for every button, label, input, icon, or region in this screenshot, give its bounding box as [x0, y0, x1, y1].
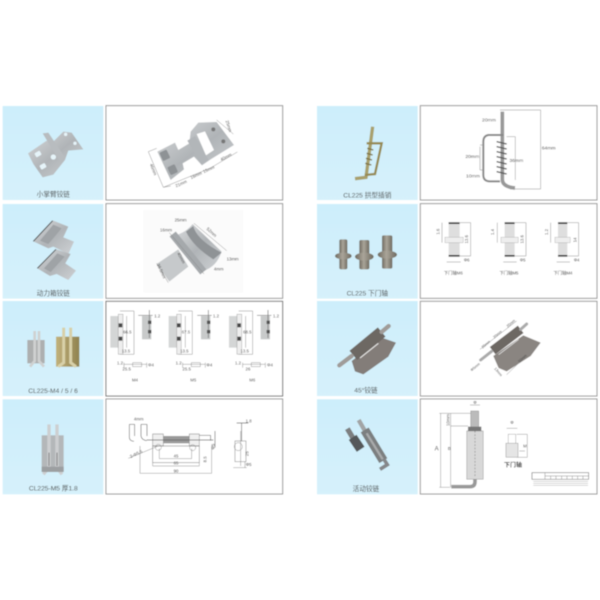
diagram: door shaft M6 M5 M4: 下门轴M4 [553, 269, 573, 276]
diagram: door shaft M6 M5 M4: 1.6 [435, 228, 440, 235]
diagram: M5 hinge side and top view: 90 [174, 469, 179, 474]
caption: CL225 拱型插销 [343, 190, 392, 199]
diagram: M5 hinge side and top view: 2-Φ5.5 [129, 449, 144, 459]
diagram: 45 degree hinge dimensions: 20mm [481, 340, 491, 349]
diagram: 45 degree hinge dimensions: Φ5mm [470, 362, 481, 372]
diagram: door shaft M6 M5 M4 [435, 222, 580, 276]
diagram: door shaft M6 M5 M4: Φ6 [464, 257, 470, 262]
diagram: door shaft M6 M5 M4: 13.6 [464, 235, 469, 244]
hinge catalogue sheet [3, 106, 597, 494]
diagram: power box hinge dimensions: 40mm [176, 251, 187, 265]
frame: technical drawing [106, 399, 283, 494]
frame: technical drawing [420, 204, 597, 298]
icon: 45 degree hinge [339, 326, 396, 374]
icon: small hinge photo [28, 132, 83, 177]
caption: 动力箱铰链 [37, 288, 70, 297]
diagram: M5 hinge side and top view: 25 [244, 451, 249, 456]
diagram: movable hinge drawing with table: Φ [473, 400, 477, 405]
diagram: latch dimensions: 20mm [482, 118, 496, 124]
diagram: power box hinge dimensions: 13mm [227, 257, 239, 262]
diagram: 45 degree hinge dimensions: 20mm [492, 330, 503, 339]
diagram: power box hinge dimensions: 4mm [214, 267, 224, 272]
diagram: M4 M5 M6 drawings: 68.5 [243, 329, 252, 334]
diagram: power box hinge dimensions: 36.5mm [156, 263, 167, 280]
frame: technical drawing [106, 301, 283, 396]
caption: 45°铰链 [354, 386, 378, 395]
diagram: M4 M5 M6 drawings: 1.2 [154, 314, 161, 319]
diagram: M5 hinge side and top view: 1.8 [246, 418, 252, 423]
caption: 小掌臂铰链 [37, 190, 70, 199]
diagram: M4 M5 M6 drawings: 1.2 [213, 314, 220, 319]
caption: CL225 下门轴 [347, 288, 388, 297]
frame: technical photo [420, 106, 597, 200]
diagram: M4 M5 M6 drawings: 67.5 [182, 329, 191, 334]
diagram: movable hinge drawing with table: A [435, 446, 439, 452]
diagram: M4 M5 M6 drawings: 13.5 [180, 349, 189, 354]
diagram: door shaft M6 M5 M4: Φ5 [520, 257, 526, 262]
icon: grey hinge [42, 424, 64, 474]
panel: row 2 left, power box hinge [3, 204, 283, 299]
frame: technical drawing [420, 399, 597, 494]
diagram: M4 M5 M6 drawings: 1.2 [176, 361, 182, 366]
diagram: movable hinge drawing with table [435, 400, 589, 487]
diagram: M5 hinge side and top view: 45 [174, 453, 179, 458]
diagram: M5 hinge side and top view: 65 [174, 461, 179, 466]
diagram: hinge dimensions: 46mm [149, 163, 158, 176]
diagram: movable hinge drawing with table: B [448, 446, 451, 451]
icon: two power box hinges [33, 221, 76, 280]
diagram: M4 M5 M6 drawings: Φ4 [206, 362, 213, 367]
diagram: power box hinge dimensions: 25mm [175, 218, 187, 223]
diagram: latch dimensions: 20mm [465, 154, 479, 160]
diagram: power box hinge dimensions [143, 210, 243, 293]
diagram: movable hinge drawing with table: M [523, 444, 527, 449]
panel: row 3 left, CL225-M4/5/6 [3, 301, 283, 396]
caption: 活动铰链 [353, 484, 380, 493]
diagram: movable hinge drawing with table: 下门轴 [504, 461, 522, 469]
diagram: hinge dimensions: 40mm [219, 152, 233, 162]
caption: CL225-M4 / 5 / 6 [28, 388, 78, 395]
diagram: M4 M5 M6 drawings: 25.5 [122, 367, 131, 372]
diagram: M5 hinge side and top view: 4mm [134, 416, 144, 421]
diagram: hinge dimensions: 25mm [225, 120, 233, 133]
icon: movable hinge parts [347, 420, 387, 469]
diagram: power box hinge dimensions: 52mm [206, 226, 218, 238]
diagram: latch dimensions: 10mm [466, 173, 480, 179]
diagram: hinge dimensions: 21mm [175, 179, 188, 188]
diagram: movable hinge drawing with table: 10mm [445, 414, 450, 426]
diagram: M4 M5 M6 drawings: M4 [132, 377, 139, 382]
diagram: hinge dimensions: 16mm [190, 170, 203, 180]
diagram: latch dimensions: 36mm [509, 158, 523, 164]
diagram: door shaft M6 M5 M4: 14 [573, 237, 578, 242]
diagram: door shaft M6 M5 M4: 1.2 [544, 228, 549, 235]
caption: CL225-M5 厚1.8 [29, 485, 78, 493]
diagram: M4 M5 M6 drawings: M5 [190, 377, 197, 382]
diagram: M4 M5 M6 drawings: 1.2 [273, 314, 280, 319]
diagram: latch dimensions [465, 110, 556, 189]
diagram: 45 degree hinge dimensions [470, 319, 541, 377]
diagram: 45 degree hinge dimensions: 13mm [493, 367, 503, 377]
diagram: M4 M5 M6 drawings: 1.2 [235, 361, 242, 366]
icon: silver and brass hinges [27, 328, 79, 367]
panel: row 1 right, CL225 arched latch [317, 106, 597, 200]
diagram: 45 degree hinge dimensions: 50mm [518, 354, 528, 363]
diagram: M4 M5 M6 drawings: Φ4 [267, 362, 273, 367]
diagram: M4 M5 M6 drawings: 1.2 [117, 361, 124, 366]
panel: row 2 right, CL225 lower door shaft [317, 204, 597, 299]
diagram: M4 M5 M6 drawings [110, 310, 280, 382]
panel: row 4 left, CL225-M5 1.8 thick [3, 399, 283, 494]
frame: photo [420, 301, 597, 396]
diagram: M5 hinge side and top view: 8.5 [203, 456, 208, 462]
frame: dimensioned drawing [106, 106, 283, 200]
diagram: M4 M5 M6 drawings: 13.5 [240, 349, 249, 354]
panel: row 1 left, small single hinge [3, 106, 283, 200]
diagram: M5 hinge side and top view: Φ5 [246, 462, 252, 467]
icon: three door shafts [335, 235, 397, 269]
diagram: M4 M5 M6 drawings: M6 [249, 377, 256, 382]
diagram: M5 hinge side and top view: Φ5 [211, 443, 216, 450]
diagram: M5 hinge side and top view [128, 416, 252, 474]
diagram: latch dimensions: 64mm [542, 146, 556, 152]
diagram: door shaft M6 M5 M4: 下门轴M6 [444, 269, 463, 276]
diagram: M4 M5 M6 drawings: 66.5 [123, 329, 132, 334]
diagram: door shaft M6 M5 M4: Φ4 [574, 257, 580, 262]
diagram: door shaft M6 M5 M4: 13.6 [519, 235, 524, 244]
diagram: power box hinge dimensions: 16mm [160, 227, 172, 232]
diagram: door shaft M6 M5 M4: 下门轴M5 [499, 269, 519, 276]
panel: row 4 right, movable hinge [317, 399, 597, 494]
icon: brass arched latch [355, 127, 382, 179]
frame: dimensioned drawing [106, 204, 283, 298]
diagram: door shaft M6 M5 M4: 1.4 [490, 228, 495, 235]
diagram: movable hinge drawing with table: Φ [510, 420, 514, 425]
diagram: M4 M5 M6 drawings: 26 [246, 367, 251, 372]
diagram: M4 M5 M6 drawings: 13.5 [122, 349, 131, 354]
diagram: 45 degree hinge dimensions: 20mm [506, 319, 516, 328]
diagram: hinge dimensions [148, 120, 237, 188]
diagram: hinge dimensions: 15mm [202, 164, 216, 174]
diagram: M4 M5 M6 drawings: Φ4 [148, 362, 155, 367]
panel: row 3 right, 45 degree hinge [317, 301, 597, 396]
diagram: M4 M5 M6 drawings: 25.5 [182, 367, 191, 372]
